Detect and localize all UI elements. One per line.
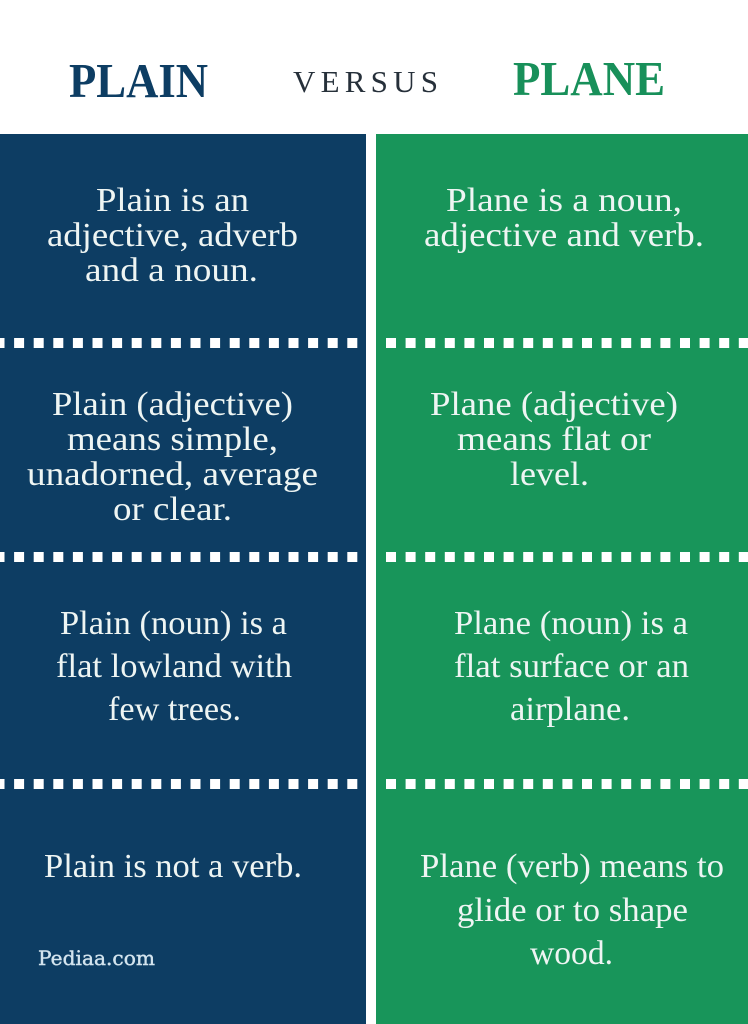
panel: plane column <box>376 134 748 1024</box>
text: plain noun meaning <box>56 605 292 728</box>
text: plain part of speech <box>47 182 298 289</box>
text: plain not a verb: Plain is not a verb. <box>44 848 302 885</box>
text: plane verb meaning <box>420 848 724 972</box>
text: plain part of speech: and a noun. <box>85 252 258 289</box>
text: plane adjective meaning <box>430 386 678 493</box>
text: plain noun meaning: few trees. <box>108 691 241 728</box>
text: plane adjective meaning: means flat or <box>457 421 652 458</box>
text: plain part of speech: Plain is an <box>96 182 249 219</box>
text: plane part of speech <box>424 182 704 254</box>
text: plane verb meaning: glide or to shape <box>457 892 688 929</box>
text: plain adjective meaning <box>27 386 318 528</box>
text: plain adjective meaning: or clear. <box>113 491 232 528</box>
logo: Pediaa.com: Pediaa.com <box>38 946 155 970</box>
text: plain adjective meaning: means simple, <box>67 421 278 458</box>
heading: PLANE: PLANE <box>513 51 665 106</box>
text: plain adjective meaning: unadorned, average <box>27 456 318 493</box>
text: plane part of speech: Plane is a noun, <box>446 182 682 219</box>
text: plain noun meaning: Plain (noun) is a <box>60 605 287 642</box>
text: plane adjective meaning: level. <box>510 456 589 493</box>
text: plain adjective meaning: Plain (adjective) <box>52 386 293 423</box>
text: plane verb meaning: Plane (verb) means to <box>420 848 724 885</box>
text: plane noun meaning: Plane (noun) is a <box>454 605 688 642</box>
text: plane noun meaning: airplane. <box>510 691 630 728</box>
text: plane verb meaning: wood. <box>530 935 613 972</box>
heading: PLAIN: PLAIN <box>69 53 208 108</box>
panel: plain column <box>0 134 366 1024</box>
text: plain part of speech: adjective, adverb <box>47 217 298 254</box>
text: plane noun meaning <box>454 605 689 728</box>
text: plane noun meaning: flat surface or an <box>454 648 689 685</box>
heading: VERSUS: VERSUS <box>293 64 438 99</box>
text: plain noun meaning: flat lowland with <box>56 648 292 685</box>
text: plane part of speech: adjective and verb. <box>424 217 704 254</box>
text: plane adjective meaning: Plane (adjective) <box>430 386 678 423</box>
